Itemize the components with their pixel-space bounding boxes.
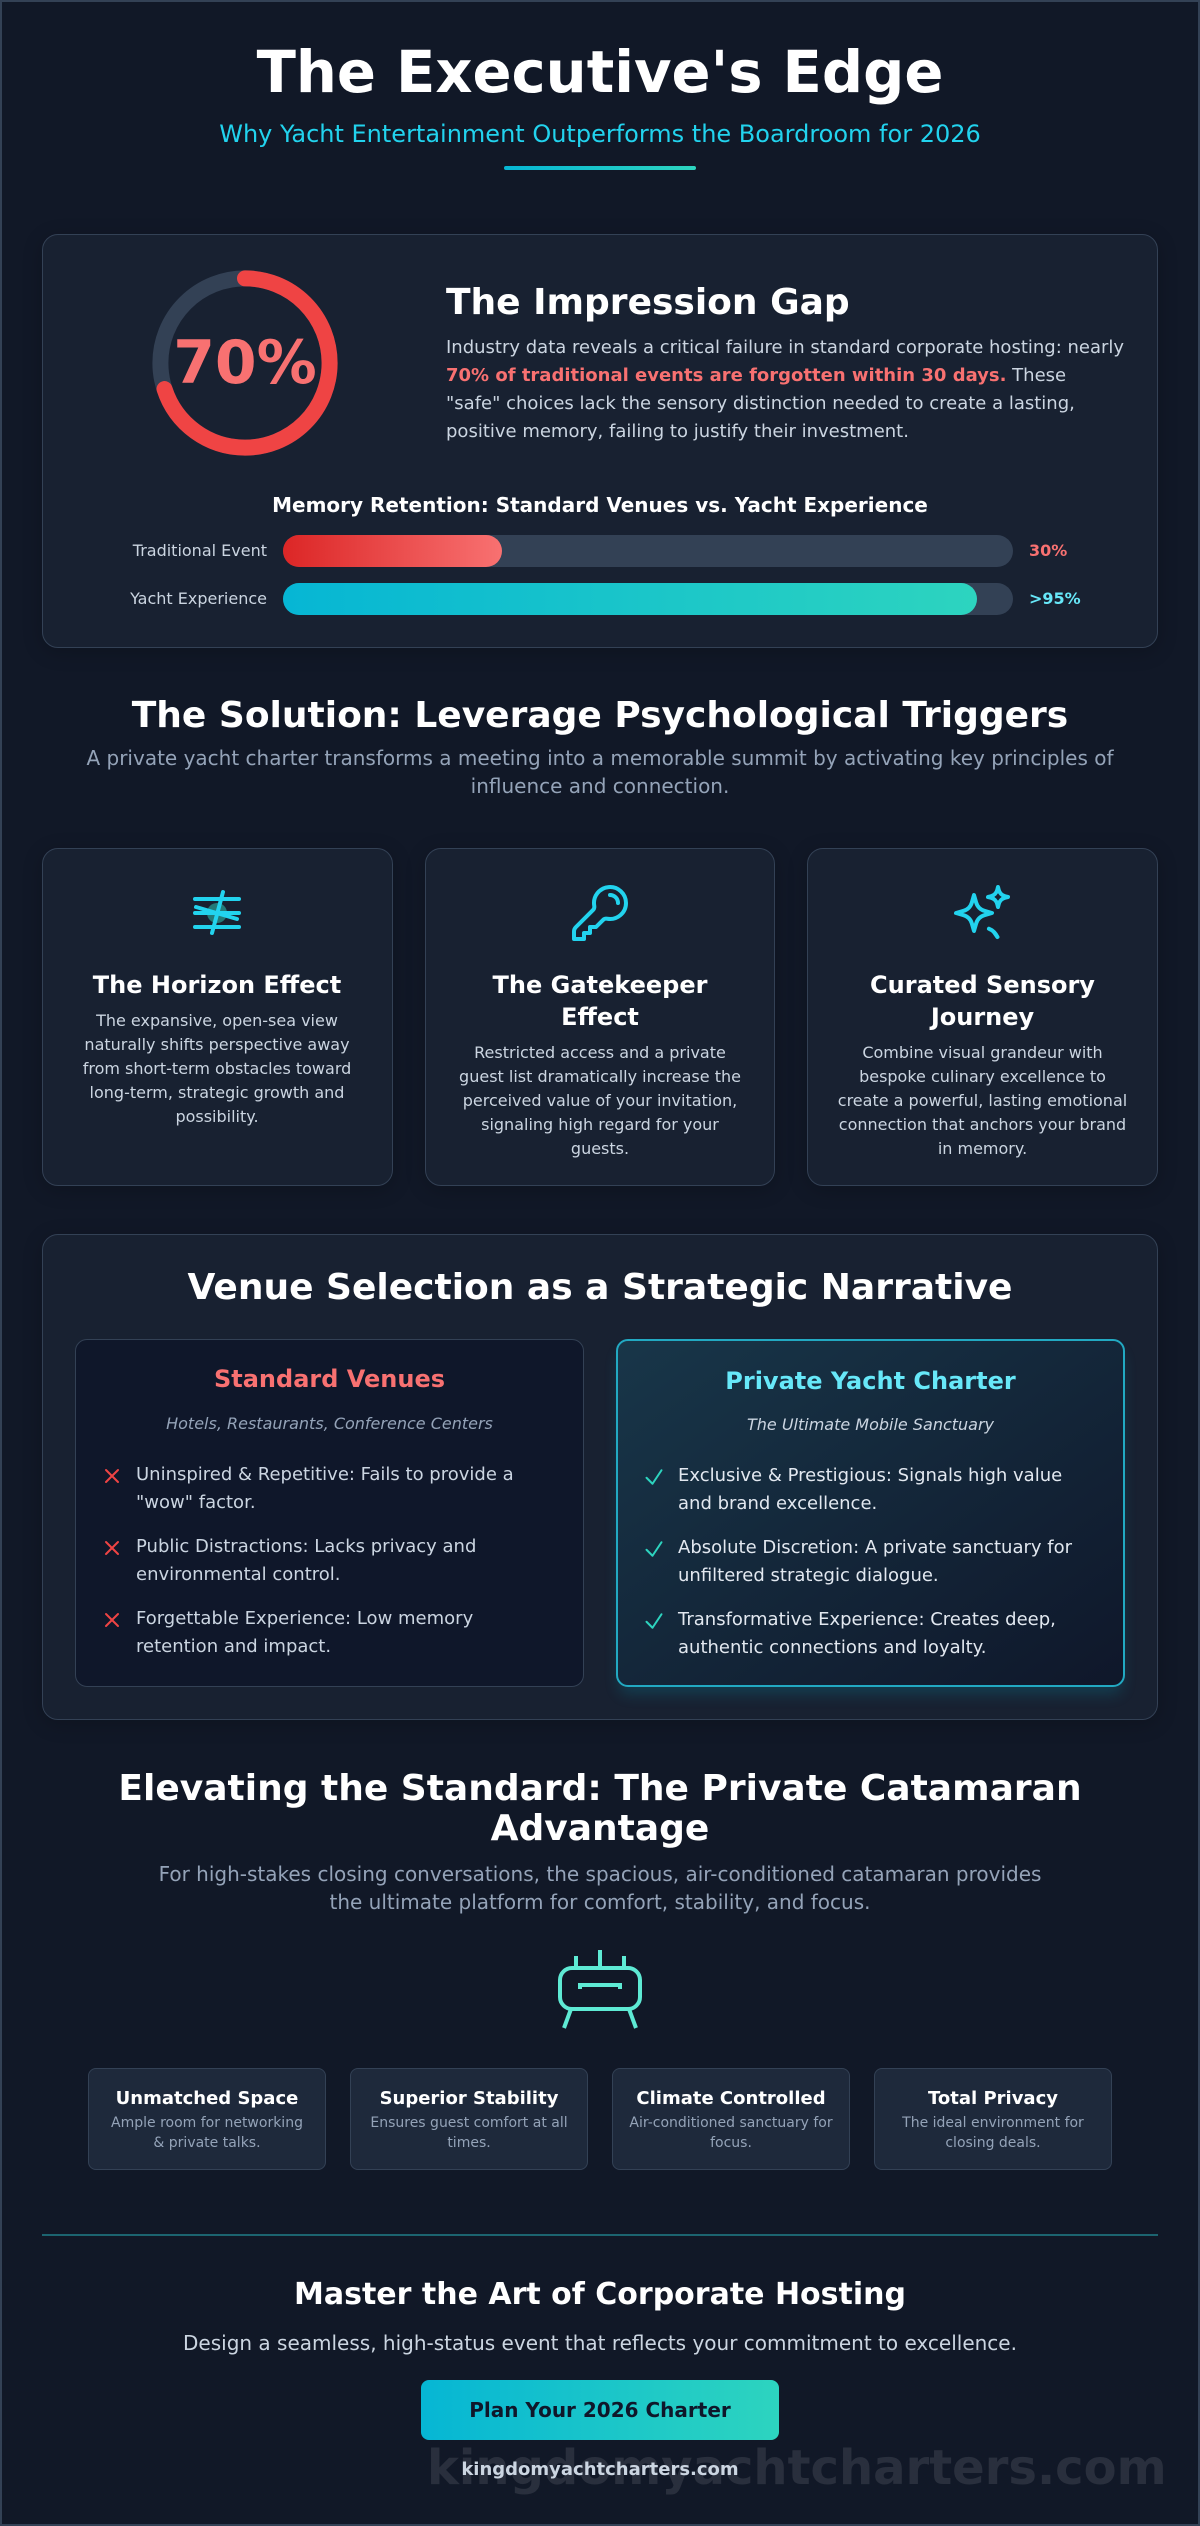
feature card: climate controlled: focus.: [710, 2135, 752, 2151]
list item: uninspired: "wow" factor.: [136, 1492, 256, 1513]
list item: uninspired: [105, 1464, 514, 1513]
panel: venue selection: [42, 1234, 1158, 1720]
panel: private yacht charter: [616, 1339, 1125, 1687]
card text: curated sensory journey: create a powerful, lasting emotional: [838, 1091, 1127, 1110]
card text: gatekeeper effect: guest list dramatically increase the: [459, 1067, 741, 1086]
call to action button: Plan Your 2026 Charter: [469, 2398, 731, 2422]
card text: horizon effect: possibility.: [175, 1107, 259, 1126]
feature card: superior stability: Superior Stability: [380, 2088, 558, 2109]
panel: the impression gap: [42, 234, 1158, 648]
bar: yacht experience: >95%: [1029, 589, 1081, 608]
list item: discretion: unfiltered strategic dialogue.: [678, 1565, 939, 1586]
solution subtitle: A private yacht charter transforms a meeting into a memorable summit by activating key principles of: [86, 746, 1114, 770]
list item: exclusive: Exclusive & Prestigious: Signals high value: [678, 1465, 1062, 1486]
bar: traditional event: 30%: [1029, 541, 1067, 560]
panel: horizon effect: [42, 848, 392, 1186]
subtitle: Why Yacht Entertainment Outperforms the Boardroom for 2026: [219, 120, 981, 148]
list item: discretion: Absolute Discretion: A private sanctuary for: [678, 1537, 1072, 1558]
feature card: superior stability: Ensures guest comfort at all: [370, 2115, 568, 2131]
card text: curated sensory journey: bespoke culinary excellence to: [859, 1067, 1106, 1086]
column title: standard venues: Standard Venues: [214, 1365, 445, 1393]
card text: gatekeeper effect: Restricted access and a private: [474, 1043, 726, 1062]
bar: yacht experience: Yacht Experience: [130, 589, 267, 608]
list item: forgettable: [105, 1608, 473, 1657]
card text: curated sensory journey: [838, 1043, 1127, 1158]
catamaran subtitle: [159, 1862, 1041, 1914]
column title: private yacht charter: Private Yacht Charter: [725, 1367, 1016, 1395]
card text: horizon effect: The expansive, open-sea view: [96, 1011, 338, 1030]
heading: catamaran advantage: [118, 1768, 1082, 1849]
feature card: unmatched space: & private talks.: [153, 2135, 261, 2151]
list item: discretion: [646, 1537, 1072, 1586]
list item: uninspired: Uninspired & Repetitive: Fails to provide a: [136, 1464, 514, 1485]
card text: horizon effect: long-term, strategic growth and: [90, 1083, 344, 1102]
feature card: total privacy: [874, 2068, 1112, 2170]
icon: horizon: [193, 890, 241, 935]
donut chart: 70%: 70%: [173, 328, 317, 398]
feature card: unmatched space: [88, 2068, 326, 2170]
icon: sparkles: [954, 885, 1010, 940]
heading: call to action: Master the Art of Corporate Hosting: [294, 2277, 906, 2312]
list item: transformative: [646, 1609, 1056, 1658]
bar: traditional event: [132, 535, 1067, 567]
feature card: superior stability: [350, 2068, 588, 2170]
bar chart: memory retention: [130, 535, 1081, 615]
card title: gatekeeper effect: The Gatekeeper: [493, 971, 707, 999]
list item: distractions: [105, 1536, 476, 1585]
list item: forgettable: retention and impact.: [136, 1636, 331, 1657]
feature card: total privacy: Total Privacy: [928, 2088, 1058, 2109]
feature card: climate controlled: [612, 2068, 850, 2170]
list item: exclusive: [646, 1465, 1062, 1514]
card title: gatekeeper effect: Effect: [561, 1003, 639, 1031]
header accent bar: [504, 166, 696, 170]
heading: catamaran advantage: Advantage: [491, 1808, 709, 1849]
feature card: climate controlled: Air-conditioned sanctuary for: [629, 2115, 833, 2131]
icon: catamaran: [558, 1950, 642, 2029]
card title: gatekeeper effect: [492, 971, 708, 1031]
card text: curated sensory journey: in memory.: [938, 1139, 1027, 1158]
card text: horizon effect: [83, 1011, 351, 1126]
card text: gatekeeper effect: perceived value of your invitation,: [463, 1091, 737, 1110]
panel: standard venues: [75, 1339, 584, 1687]
title: The Executive's Edge: [257, 39, 943, 106]
impression gap paragraph: positive memory, failing to justify their investment.: [446, 421, 909, 442]
solution subtitle: [86, 746, 1114, 798]
card title: curated sensory journey: Journey: [931, 1003, 1034, 1031]
catamaran subtitle: the ultimate platform for comfort, stability, and focus.: [329, 1890, 870, 1914]
column subtitle: Hotels, Restaurants, Conference Centers: [166, 1414, 493, 1433]
impression gap paragraph: Industry data reveals a critical failure in standard corporate hosting: nearly: [446, 337, 1124, 358]
heading: venue selection: Venue Selection as a Strategic Narrative: [188, 1267, 1012, 1308]
solution subtitle: influence and connection.: [471, 774, 729, 798]
card text: gatekeeper effect: [459, 1043, 741, 1158]
website url: kingdomyachtcharters.com: [461, 2459, 739, 2480]
bar chart heading: Memory Retention: Standard Venues vs. Yacht Experience: [272, 493, 928, 517]
list item: distractions: environmental control.: [136, 1564, 341, 1585]
heading: the solution: The Solution: Leverage Psychological Triggers: [132, 695, 1068, 736]
column subtitle: The Ultimate Mobile Sanctuary: [747, 1415, 994, 1434]
feature card: superior stability: times.: [447, 2135, 491, 2151]
call to action text: Design a seamless, high-status event that reflects your commitment to excellence.: [183, 2331, 1017, 2355]
feature card: total privacy: The ideal environment for: [902, 2115, 1084, 2131]
card title: curated sensory journey: [870, 971, 1095, 1031]
heading: the impression gap: The Impression Gap: [446, 282, 850, 323]
donut chart: 70%: [152, 270, 338, 456]
list item: forgettable: Forgettable Experience: Low memory: [136, 1608, 473, 1629]
impression gap paragraph: "safe" choices lack the sensory distinction needed to create a lasting,: [446, 393, 1075, 414]
list item: distractions: Public Distractions: Lacks privacy and: [136, 1536, 476, 1557]
card text: curated sensory journey: connection that anchors your brand: [839, 1115, 1126, 1134]
bar: traditional event: Traditional Event: [133, 541, 267, 560]
card text: gatekeeper effect: signaling high regard for your: [481, 1115, 719, 1134]
list item: exclusive: and brand excellence.: [678, 1493, 877, 1514]
card title: horizon effect: The Horizon Effect: [93, 971, 341, 999]
card text: horizon effect: naturally shifts perspective away: [84, 1035, 350, 1054]
heading: catamaran advantage: Elevating the Standard: The Private Catamaran: [118, 1768, 1082, 1809]
impression gap paragraph: [446, 337, 1124, 442]
feature card: total privacy: closing deals.: [945, 2135, 1041, 2151]
card text: curated sensory journey: Combine visual grandeur with: [862, 1043, 1103, 1062]
icon: key: [572, 885, 628, 941]
panel: curated sensory journey: [807, 848, 1158, 1186]
list item: transformative: Transformative Experience: Creates deep,: [678, 1609, 1056, 1630]
list item: transformative: authentic connections and loyalty.: [678, 1637, 986, 1658]
bar: yacht experience: [130, 583, 1081, 615]
panel: gatekeeper effect: [425, 848, 775, 1186]
watermark: kingdomyachtcharters.com: [427, 2440, 1167, 2496]
feature card: unmatched space: Ample room for networking: [111, 2115, 303, 2131]
card text: gatekeeper effect: guests.: [571, 1139, 629, 1158]
card text: horizon effect: from short-term obstacles toward: [83, 1059, 351, 1078]
catamaran subtitle: For high-stakes closing conversations, the spacious, air-conditioned catamaran provides: [159, 1862, 1041, 1886]
call to action button: [421, 2380, 779, 2440]
feature card: climate controlled: Climate Controlled: [636, 2088, 826, 2109]
feature card: unmatched space: Unmatched Space: [116, 2088, 298, 2109]
impression gap paragraph: 70% of traditional events are forgotten within 30 days. These: [446, 365, 1066, 386]
card title: curated sensory journey: Curated Sensory: [870, 971, 1095, 999]
